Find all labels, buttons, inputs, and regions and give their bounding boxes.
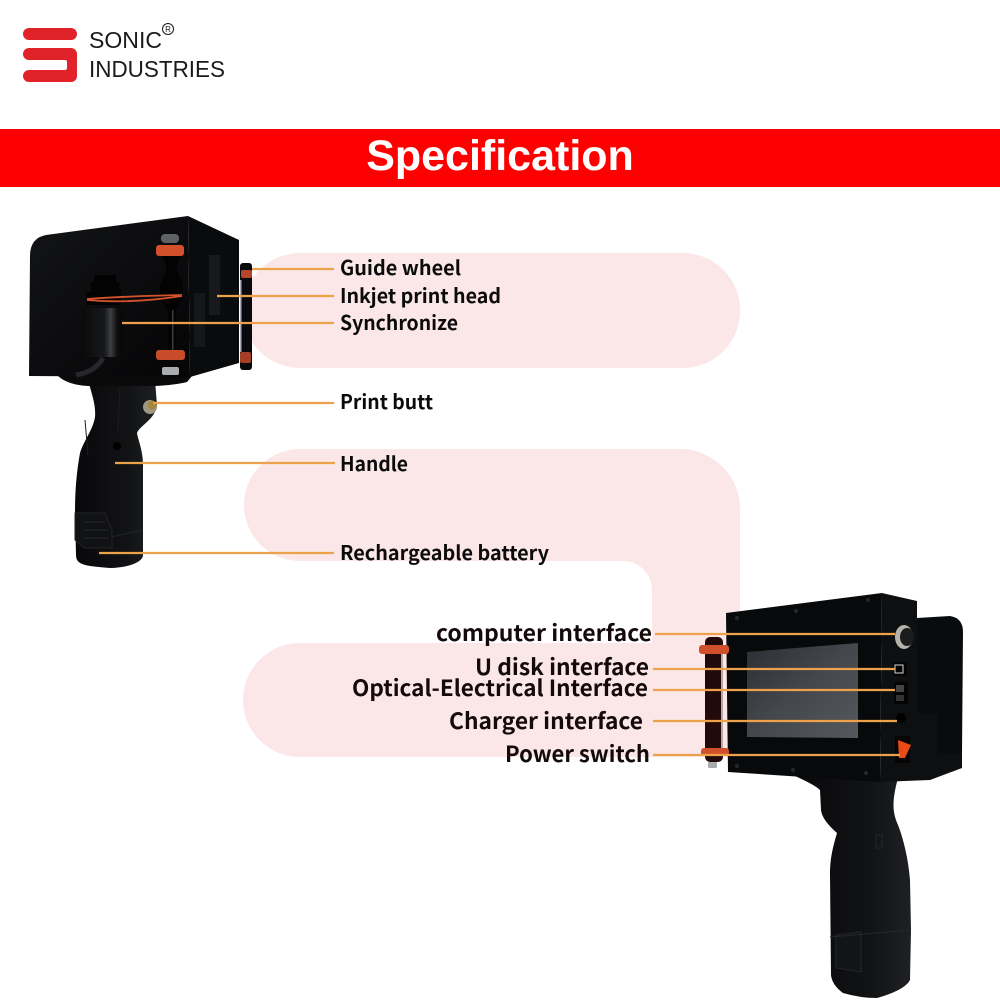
base plate [58, 376, 192, 386]
labels: right printer: U disk interface [475, 650, 649, 682]
labels: right printer [352, 616, 652, 769]
print button [143, 400, 157, 414]
printer body side [188, 216, 239, 377]
callout lines: left printer [99, 269, 335, 553]
side body [880, 593, 962, 782]
finger hole and grip seam [85, 388, 121, 455]
guide roller [699, 637, 729, 768]
battery [75, 513, 143, 548]
labels: right printer: computer interface [436, 616, 652, 648]
synchronize cylinder [82, 308, 123, 357]
handle [795, 776, 911, 998]
background shape: pink S ribbon [243, 449, 740, 757]
labels: right printer: Power switch [505, 737, 650, 769]
optical port [894, 682, 908, 704]
labels: left printer: Synchronize [340, 307, 458, 336]
sync wheel ribs [86, 275, 121, 305]
computer connector [895, 625, 914, 649]
screws [735, 598, 870, 775]
USB port [893, 662, 907, 676]
charger port [896, 713, 906, 723]
printer handle [75, 380, 157, 568]
labels: right printer: Charger interface [449, 704, 643, 736]
logo: Sonic Industries [23, 24, 225, 82]
logo wordmark [89, 24, 225, 82]
guide roller left [156, 234, 185, 375]
callout lines: right printer [653, 634, 900, 755]
belt [87, 295, 182, 301]
left printer: side view [29, 216, 252, 568]
labels: left printer: Print butt [340, 386, 434, 415]
logo wordmark: INDUSTRIES [89, 56, 225, 82]
guide roller right [240, 263, 252, 370]
front body [726, 593, 882, 782]
logo wordmark: R [165, 25, 171, 34]
power switch [895, 736, 911, 763]
logo mark [23, 28, 77, 82]
touch screen [747, 643, 858, 738]
title banner [0, 129, 1000, 187]
labels: left printer: Inkjet print head [340, 280, 501, 309]
grip details [830, 835, 911, 937]
rear plate [917, 616, 963, 753]
labels: right printer: Optical-Electrical Interface [352, 671, 648, 703]
right printer: front view [699, 593, 963, 998]
side window slots [194, 255, 220, 347]
labels: left printer: Guide wheel [340, 252, 461, 281]
logo wordmark: SONIC [89, 27, 162, 53]
battery vent [836, 932, 861, 972]
background shape: upper pink pill [243, 253, 740, 368]
cable [76, 358, 103, 375]
labels: left printer: Rechargeable battery [340, 537, 550, 566]
title banner: Specification [366, 132, 634, 180]
labels: left printer [340, 252, 550, 566]
printer body front [29, 216, 190, 377]
labels: left printer: Handle [340, 448, 408, 477]
